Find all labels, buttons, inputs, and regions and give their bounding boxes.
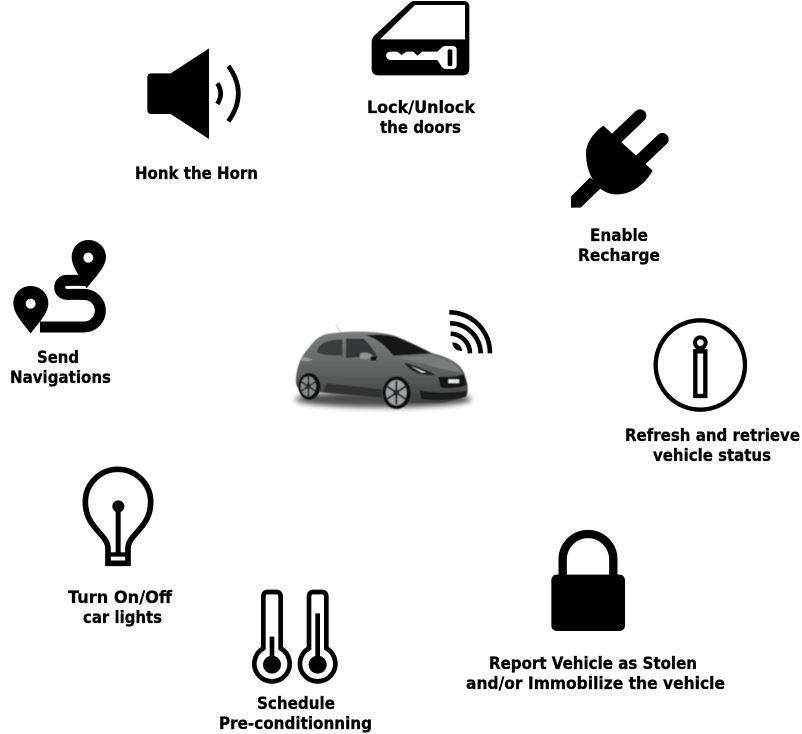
icon: route with two map pins — [13, 240, 106, 333]
feature: honk the horn — [135, 48, 258, 183]
label: lock/unlock the doors: Lock/Unlock — [367, 98, 476, 117]
label: honk the horn: Honk the Horn — [135, 164, 258, 183]
icon: speaker — [147, 48, 238, 139]
icon: light bulb — [85, 469, 151, 563]
label: lock/unlock the doors: the doors — [380, 118, 461, 137]
center: connected car — [295, 312, 490, 409]
label: schedule pre-conditioning: Pre-conditionning — [219, 714, 372, 733]
label: send navigations: Navigations — [10, 368, 111, 387]
label: send navigations: Send — [37, 348, 79, 367]
label: schedule pre-conditioning: Schedule — [257, 694, 335, 713]
label: report vehicle as stolen: and/or Immobilize the vehicle — [466, 674, 725, 693]
label: enable recharge: Enable — [590, 226, 648, 245]
icon: two thermometers — [254, 592, 335, 681]
label: turn on/off car lights: Turn On/Off — [68, 588, 173, 607]
icon: electric plug — [571, 116, 662, 208]
car image — [295, 325, 472, 409]
label: refresh and retrieve vehicle status: vehicle status — [653, 446, 771, 465]
label: enable recharge: Recharge — [578, 246, 660, 265]
label: turn on/off car lights: car lights — [83, 608, 162, 627]
feature: send navigations — [10, 240, 111, 387]
label: report vehicle as stolen: Report Vehicle as Stolen — [489, 654, 697, 673]
feature: enable recharge — [571, 116, 662, 265]
icon: wireless signal — [449, 312, 490, 353]
feature: lock/unlock the doors — [367, 1, 481, 137]
feature: refresh and retrieve vehicle status — [625, 320, 802, 465]
icon: information circle — [656, 320, 745, 410]
icon: car door with key — [372, 1, 469, 75]
feature: turn on/off car lights — [68, 469, 178, 627]
icon: padlock — [551, 534, 625, 631]
feature: schedule pre-conditioning — [219, 592, 372, 733]
feature: report vehicle as stolen — [466, 534, 725, 693]
